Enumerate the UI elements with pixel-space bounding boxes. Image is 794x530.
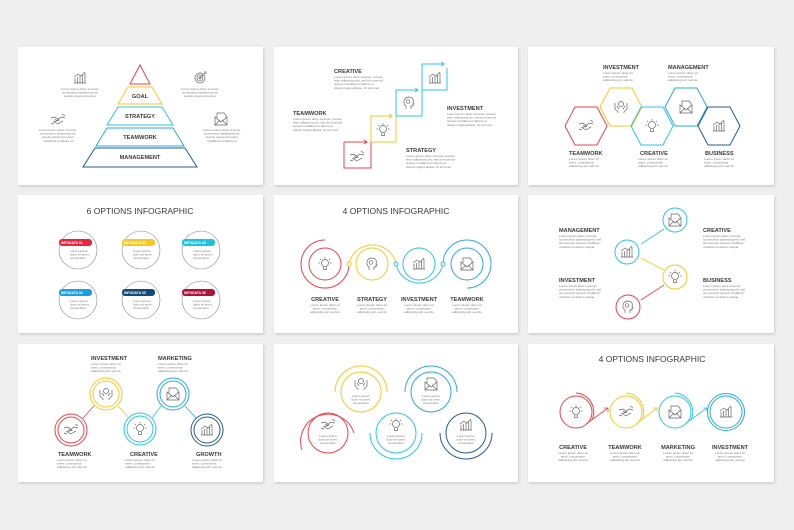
circle navy: dolor sit amet, [456, 438, 476, 442]
option 03: INFODATA 03 [184, 241, 206, 245]
icon envelope + text: incididunt ut labore et [207, 139, 237, 143]
label BUSINESS [703, 278, 745, 299]
pyramid red apex [130, 65, 150, 84]
label STRATEGY: tetur adipiscing elit, sed do eiusmod [406, 158, 455, 162]
label INVESTMENT: tempor incididunt ut labore et [447, 119, 487, 123]
label TEAMWORK: TEAMWORK [608, 445, 642, 451]
circle red [301, 413, 354, 453]
ring TEAMWORK: amet, consectetur [455, 307, 479, 311]
label CREATIVE: ut labore et dolore magna [703, 245, 739, 249]
label STRATEGY: dolore magna aliqua. Ut enim ad [406, 165, 451, 169]
icon chart + text: sed do eiusmod tempor [64, 94, 96, 98]
circle growth [191, 414, 223, 446]
label CREATIVE: CREATIVE [559, 445, 587, 451]
label TEAMWORK: adipiscing elit, sed do [569, 164, 599, 168]
label TEAMWORK: tetur adipiscing elit, sed do eiusmod [293, 121, 342, 125]
label CREATIVE: dolore magna aliqua. Ut enim ad [334, 86, 379, 90]
icon target + text [181, 72, 219, 98]
label MANAGEMENT [559, 228, 601, 249]
label STRATEGY: Lorem ipsum dolor sit amet, consec [406, 154, 455, 158]
label INVESTMENT: adipiscing elit, sed do [715, 458, 745, 462]
icon hands + text: Lorem ipsum dolor sit amet, [39, 128, 77, 132]
label INVESTMENT: adipiscing elit, sed do [603, 78, 633, 82]
option 04: dolor sit amet, [70, 303, 90, 307]
label MANAGEMENT: MANAGEMENT [668, 65, 709, 71]
circle head [616, 295, 640, 319]
ring CREATIVE: Lorem ipsum dolor sit [310, 303, 340, 307]
hex yellow [600, 88, 642, 126]
ring INVESTMENT: adipiscing elit, sed do [404, 310, 434, 314]
icon hands + text: sed do eiusmod tempor [42, 135, 74, 139]
circle marketing [157, 378, 189, 410]
label GROWTH: amet, consectetur [192, 462, 217, 466]
arrows [83, 406, 196, 418]
option 05: Lorem ipsum [133, 299, 151, 303]
label TEAMWORK: TEAMWORK [569, 151, 603, 157]
label TEAMWORK: Lorem ipsum dolor sit [569, 157, 599, 161]
icon chart + text: Lorem ipsum dolor sit amet, [61, 87, 99, 91]
option 03 [182, 231, 220, 269]
label BUSINESS: adipiscing elit, sed do [704, 164, 734, 168]
ring STRATEGY [347, 245, 396, 314]
label INVESTMENT: amet, consectetur [603, 75, 628, 79]
option 04: Lorem ipsum [70, 299, 88, 303]
ring INVESTMENT: INVESTMENT [401, 297, 438, 303]
label MANAGEMENT: adipiscing elit, sed do [668, 78, 698, 82]
circle blue [405, 366, 457, 412]
step cyan [396, 88, 422, 116]
ring STRATEGY: STRATEGY [357, 297, 387, 303]
circle chart [615, 240, 639, 264]
label TEAMWORK [293, 111, 342, 132]
label CREATIVE: amet, consectetur [125, 462, 150, 466]
label GROWTH [192, 452, 222, 469]
circle red: Lorem ipsum [319, 434, 337, 438]
label CREATIVE: adipiscing elit, sed do [558, 458, 588, 462]
label INVESTMENT: Lorem ipsum dolor sit amet, consec [447, 112, 496, 116]
circle blue: consectetur [423, 401, 439, 405]
label MARKETING: amet, consectetur [158, 366, 183, 370]
label CREATIVE: adipiscing elit, sed do [125, 465, 155, 469]
label GROWTH: GROWTH [196, 452, 221, 458]
label CREATIVE [334, 69, 383, 90]
circle navy: consectetur [458, 441, 474, 445]
label INVESTMENT: dolore magna aliqua. Ut enim ad [447, 123, 492, 127]
label GROWTH: adipiscing elit, sed do [192, 465, 222, 469]
circle TEAMWORK [610, 393, 644, 428]
circle navy: Lorem ipsum [457, 434, 475, 438]
label INVESTMENT [712, 445, 749, 462]
label INVESTMENT: Lorem ipsum dolor sit [603, 71, 633, 75]
arrows [586, 408, 707, 424]
circle red: consectetur [320, 441, 336, 445]
hex red [565, 107, 607, 145]
label INVESTMENT [91, 356, 128, 373]
option 06: Lorem ipsum [193, 299, 211, 303]
label INVESTMENT [559, 278, 601, 299]
circle MARKETING [659, 393, 693, 428]
label TEAMWORK: adipiscing elit, sed do [57, 465, 87, 469]
circle blue: dolor sit amet, [421, 398, 441, 402]
label TEAMWORK: Lorem ipsum dolor sit [610, 451, 640, 455]
slide 6: s-curve [528, 195, 774, 333]
label MARKETING: MARKETING [661, 445, 695, 451]
pyramid level GOAL [118, 87, 162, 104]
icon envelope + text: consectetur adipiscing elit, [204, 132, 240, 136]
circle yellow: Lorem ipsum [352, 394, 370, 398]
label INVESTMENT: amet, consectetur [91, 366, 116, 370]
label INVESTMENT: Lorem ipsum dolor sit [715, 451, 745, 455]
circle envelope [663, 208, 687, 232]
ring CREATIVE: amet, consectetur [313, 307, 337, 311]
label BUSINESS: BUSINESS [703, 278, 732, 284]
label MARKETING [661, 445, 695, 462]
circle yellow: consectetur [353, 401, 369, 405]
option 05: INFODATA 05 [124, 291, 146, 295]
ring TEAMWORK: Lorem ipsum dolor sit [452, 303, 482, 307]
label MARKETING: amet, consectetur [666, 455, 690, 459]
icon chart + text: consectetur adipiscing elit, [62, 91, 98, 95]
label INVESTMENT: INVESTMENT [559, 278, 596, 284]
ring INVESTMENT: amet, consectetur [407, 307, 431, 311]
label INVESTMENT: do eiusmod tempor incididunt [559, 291, 600, 295]
option 02 [122, 231, 160, 269]
slide 2: staircase [274, 47, 518, 185]
ring STRATEGY: Lorem ipsum dolor sit [357, 303, 387, 307]
slide 1: pyramid [18, 47, 263, 185]
label CREATIVE: consectetur adipiscing elit, sed [703, 238, 745, 242]
label TEAMWORK: dolore magna aliqua. Ut enim ad [293, 128, 338, 132]
circle cyan: dolor sit amet, [386, 438, 406, 442]
label CREATIVE [638, 151, 668, 168]
slide 4: 6 options [18, 195, 263, 333]
slide 3: hexagons [528, 47, 774, 185]
circle cyan: Lorem ipsum [387, 434, 405, 438]
label CREATIVE: CREATIVE [130, 452, 158, 458]
label MARKETING: adipiscing elit, sed do [663, 458, 693, 462]
icon chart + text [61, 72, 99, 98]
option 03: dolor sit amet, [193, 253, 213, 257]
label INVESTMENT: Lorem ipsum dolor sit amet, [559, 284, 597, 288]
label MARKETING: MARKETING [158, 356, 192, 362]
label TEAMWORK [57, 452, 92, 469]
option 05: consectetur [133, 306, 149, 310]
ring INVESTMENT: Lorem ipsum dolor sit [404, 303, 434, 307]
label MANAGEMENT: amet, consectetur [668, 75, 693, 79]
icon envelope + text: sed do eiusmod tempor [206, 135, 238, 139]
option 04: consectetur [70, 306, 86, 310]
ring STRATEGY: adipiscing elit, sed do [357, 310, 387, 314]
circle CREATIVE [560, 393, 594, 428]
label CREATIVE: tempor incididunt ut labore et [334, 82, 374, 86]
title: 4 OPTIONS INFOGRAPHIC [343, 206, 449, 216]
label INVESTMENT: Lorem ipsum dolor sit [91, 362, 121, 366]
label CREATIVE: Lorem ipsum dolor sit [125, 458, 155, 462]
label TEAMWORK: TEAMWORK [293, 111, 327, 117]
label MANAGEMENT: do eiusmod tempor incididunt [559, 241, 600, 245]
circle cyan: consectetur [388, 441, 404, 445]
slide 9: 4 options arrows [528, 344, 774, 482]
label INVESTMENT: INVESTMENT [91, 356, 128, 362]
circle red: dolor sit amet, [318, 438, 338, 442]
label STRATEGY: STRATEGY [406, 148, 436, 154]
label CREATIVE: amet, consectetur [561, 455, 585, 459]
ring CREATIVE: adipiscing elit, sed do [310, 310, 340, 314]
slide 5: 4 options rings [274, 195, 518, 333]
label INVESTMENT: INVESTMENT [603, 65, 640, 71]
label CREATIVE: Lorem ipsum dolor sit amet, consec [334, 75, 383, 79]
icon hands + text [39, 114, 77, 143]
label MARKETING [158, 356, 192, 373]
circle teamwork [55, 414, 87, 446]
label CREATIVE [125, 452, 158, 469]
pyramid level STRATEGY: STRATEGY [125, 114, 155, 120]
label TEAMWORK: Lorem ipsum dolor sit amet, consec [293, 117, 342, 121]
title: 4 OPTIONS INFOGRAPHIC [599, 354, 705, 364]
option 02: dolor sit amet, [133, 253, 153, 257]
step yellow [371, 114, 396, 142]
icon target + text: sed do eiusmod tempor [184, 94, 216, 98]
option 02: INFODATA 02 [124, 241, 146, 245]
label INVESTMENT: adipiscing elit, sed do [91, 369, 121, 373]
hex navy [698, 107, 740, 145]
pyramid level TEAMWORK [96, 128, 184, 146]
option 02: consectetur [133, 256, 149, 260]
label BUSINESS [704, 151, 734, 168]
label BUSINESS: Lorem ipsum dolor sit [704, 157, 734, 161]
circle bulb [663, 265, 687, 289]
label BUSINESS: amet, consectetur [704, 161, 729, 165]
label TEAMWORK: amet, consectetur [613, 455, 637, 459]
label TEAMWORK: TEAMWORK [58, 452, 92, 458]
pyramid level MANAGEMENT: MANAGEMENT [120, 155, 161, 161]
label MANAGEMENT [668, 65, 709, 82]
circle yellow [335, 366, 387, 412]
label CREATIVE [703, 228, 745, 249]
option 04 [59, 281, 97, 319]
slide 8: interlocking arcs [274, 344, 518, 482]
option 01: consectetur [70, 256, 86, 260]
label INVESTMENT: amet, consectetur [718, 455, 742, 459]
label BUSINESS: ut labore et dolore magna [703, 295, 739, 299]
option 06: dolor sit amet, [193, 303, 213, 307]
label INVESTMENT [603, 65, 640, 82]
ring TEAMWORK: TEAMWORK [450, 297, 484, 303]
label CREATIVE: CREATIVE [334, 69, 362, 75]
icon envelope + text: Lorem ipsum dolor sit amet, [203, 128, 241, 132]
label CREATIVE: do eiusmod tempor incididunt [703, 241, 744, 245]
circle yellow: dolor sit amet, [351, 398, 371, 402]
label TEAMWORK [569, 151, 603, 168]
option 01: dolor sit amet, [70, 253, 90, 257]
label MARKETING: Lorem ipsum dolor sit [158, 362, 188, 366]
label CREATIVE: Lorem ipsum dolor sit [638, 157, 668, 161]
option 03: consectetur [193, 256, 209, 260]
label CREATIVE: Lorem ipsum dolor sit amet, [703, 234, 741, 238]
label CREATIVE: adipiscing elit, sed do [638, 164, 668, 168]
label TEAMWORK: amet, consectetur [57, 462, 82, 466]
label INVESTMENT: INVESTMENT [447, 106, 484, 112]
option 06 [182, 281, 220, 319]
label INVESTMENT [447, 106, 496, 127]
label TEAMWORK: amet, consectetur [569, 161, 594, 165]
circle investment [90, 378, 122, 410]
label INVESTMENT: ut labore et dolore magna [559, 295, 595, 299]
icon envelope + text [203, 113, 241, 143]
icon hands + text: incididunt ut labore et [43, 139, 73, 143]
hex cyan [631, 107, 673, 145]
option 04: INFODATA 04 [61, 291, 83, 295]
label INVESTMENT: INVESTMENT [712, 445, 749, 451]
circle blue: Lorem ipsum [422, 394, 440, 398]
pyramid level MANAGEMENT [83, 148, 197, 167]
option 06: consectetur [193, 306, 209, 310]
circle cyan [370, 413, 422, 459]
ring CREATIVE [301, 240, 349, 314]
step red [344, 140, 371, 168]
ring CREATIVE: CREATIVE [311, 297, 339, 303]
option 02: Lorem ipsum [133, 249, 151, 253]
label MARKETING: adipiscing elit, sed do [158, 369, 188, 373]
ring TEAMWORK [441, 240, 491, 314]
label CREATIVE [558, 445, 588, 462]
pyramid level TEAMWORK: TEAMWORK [123, 135, 157, 141]
label CREATIVE: tetur adipiscing elit, sed do eiusmod [334, 79, 383, 83]
title: 6 OPTIONS INFOGRAPHIC [87, 206, 193, 216]
label MANAGEMENT: MANAGEMENT [559, 228, 600, 234]
connectors [641, 229, 664, 300]
pyramid level STRATEGY [107, 107, 173, 125]
circle creative [124, 413, 156, 445]
label BUSINESS: do eiusmod tempor incididunt [703, 291, 744, 295]
hex blue [665, 88, 707, 126]
label CREATIVE: CREATIVE [703, 228, 731, 234]
ring INVESTMENT [394, 248, 443, 314]
label MANAGEMENT: Lorem ipsum dolor sit amet, [559, 234, 597, 238]
label BUSINESS: BUSINESS [705, 151, 734, 157]
label MARKETING: Lorem ipsum dolor sit [663, 451, 693, 455]
option 06: INFODATA 06 [184, 291, 206, 295]
option 01: INFODATA 01 [61, 241, 83, 245]
icon target + text: consectetur adipiscing elit, [182, 91, 218, 95]
label TEAMWORK: adipiscing elit, sed do [610, 458, 640, 462]
option 01: Lorem ipsum [70, 249, 88, 253]
label STRATEGY [406, 148, 455, 169]
circle INVESTMENT [708, 394, 744, 430]
label TEAMWORK: Lorem ipsum dolor sit [57, 458, 87, 462]
label BUSINESS: consectetur adipiscing elit, sed [703, 288, 745, 292]
step blue [422, 62, 447, 90]
label TEAMWORK [608, 445, 642, 462]
label BUSINESS: Lorem ipsum dolor sit amet, [703, 284, 741, 288]
label MANAGEMENT: Lorem ipsum dolor sit [668, 71, 698, 75]
icon hands + text: consectetur adipiscing elit, [40, 132, 76, 136]
circle navy [440, 413, 492, 459]
label CREATIVE: CREATIVE [640, 151, 668, 157]
label GROWTH: Lorem ipsum dolor sit [192, 458, 222, 462]
option 01 [59, 231, 97, 269]
label CREATIVE: amet, consectetur [638, 161, 663, 165]
icon target + text: Lorem ipsum dolor sit amet, [181, 87, 219, 91]
label STRATEGY: tempor incididunt ut labore et [406, 161, 446, 165]
option 05: dolor sit amet, [133, 303, 153, 307]
pyramid level GOAL: GOAL [132, 94, 149, 100]
ring STRATEGY: amet, consectetur [360, 307, 384, 311]
slide 7: zigzag circles [18, 344, 263, 482]
option 05 [122, 281, 160, 319]
label INVESTMENT: tetur adipiscing elit, sed do eiusmod [447, 116, 496, 120]
label INVESTMENT: consectetur adipiscing elit, sed [559, 288, 601, 292]
label MANAGEMENT: consectetur adipiscing elit, sed [559, 238, 601, 242]
label CREATIVE: Lorem ipsum dolor sit [558, 451, 588, 455]
option 03: Lorem ipsum [193, 249, 211, 253]
label MANAGEMENT: ut labore et dolore magna [559, 245, 595, 249]
label TEAMWORK: tempor incididunt ut labore et [293, 124, 333, 128]
ring TEAMWORK: adipiscing elit, sed do [452, 310, 482, 314]
